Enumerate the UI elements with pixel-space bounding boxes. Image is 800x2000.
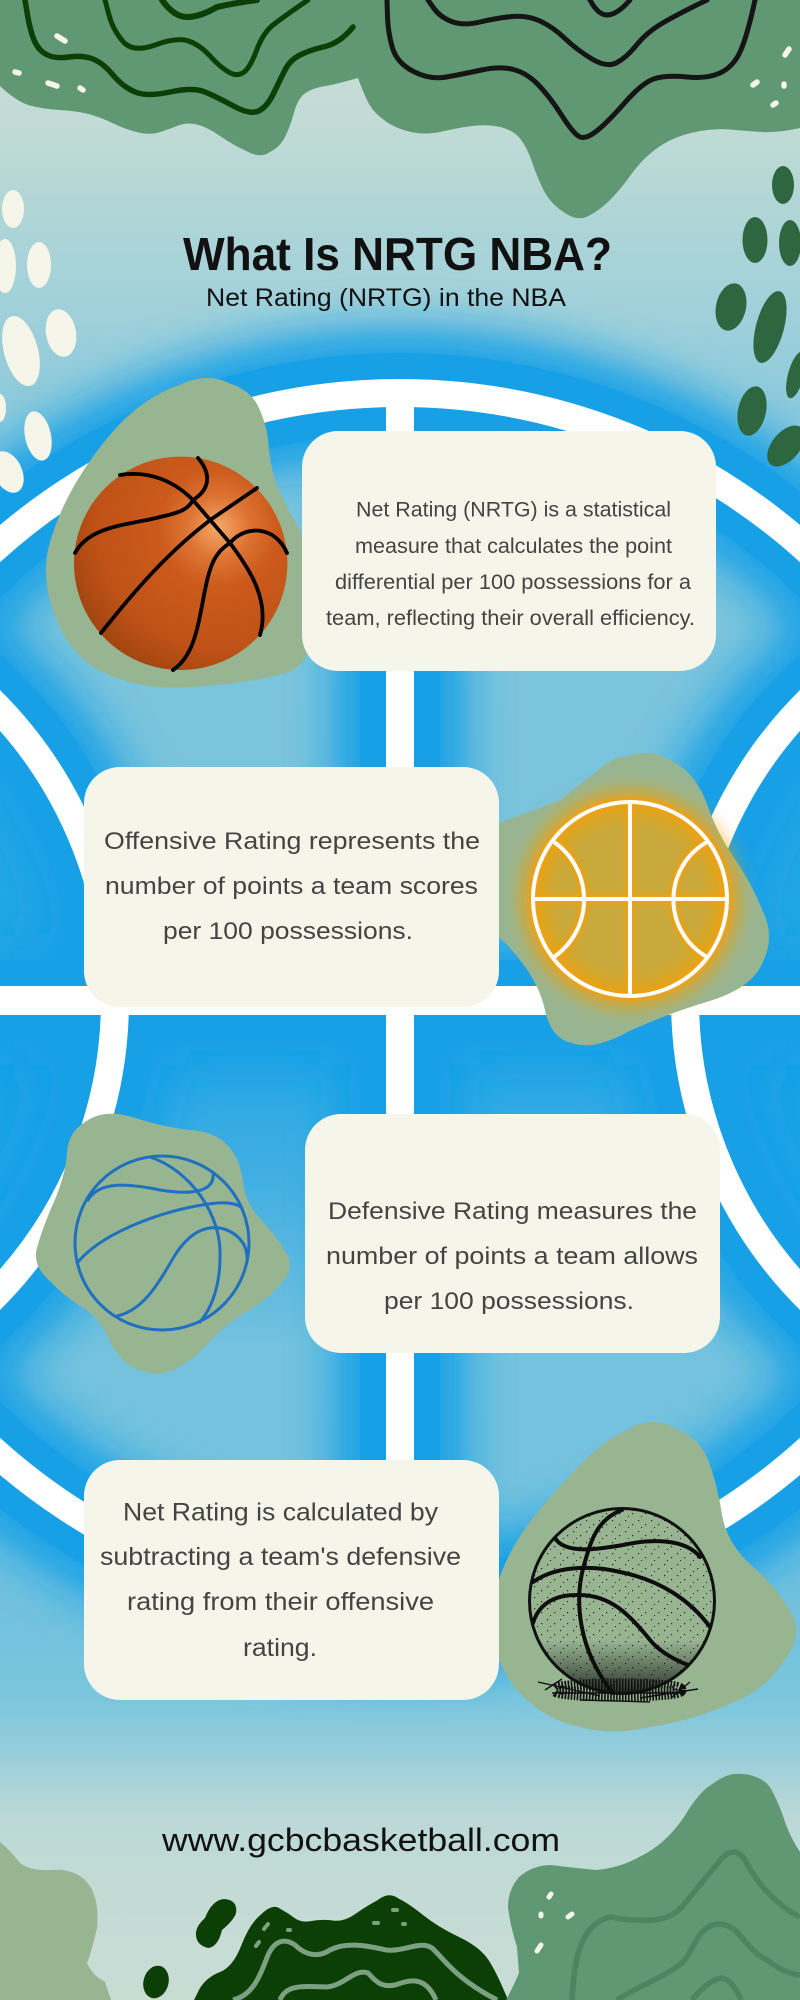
footer website: www.gcbcbasketball.com — [161, 1822, 560, 1858]
card text — [100, 1498, 461, 1662]
grass shadow — [538, 1679, 698, 1702]
icon: blue outline basketball — [75, 1156, 249, 1330]
card text: measure that calculates the point — [355, 534, 672, 558]
green blob behind neon basketball — [497, 756, 766, 1042]
card background — [302, 431, 716, 671]
cream ticks — [537, 1894, 572, 1951]
panel: net rating definition — [49, 381, 716, 685]
top decorative green blobs — [0, 0, 800, 218]
darker wavy lines — [572, 1852, 800, 2000]
panel: defensive rating — [39, 1114, 720, 1371]
icon: neon basketball — [532, 801, 728, 997]
green blob behind basketball — [49, 381, 310, 685]
card background — [84, 1460, 499, 1700]
bottom right green blob — [506, 1774, 800, 2000]
card background — [84, 767, 499, 1007]
dark green squiggles — [25, 0, 353, 112]
bottom left light green blob — [0, 1842, 111, 2000]
card text: subtracting a team's defensive — [100, 1543, 461, 1571]
card text: Defensive Rating measures the — [328, 1198, 697, 1225]
wavy lines — [233, 1941, 497, 2000]
subtitle: Net Rating (NRTG) in the NBA — [206, 284, 566, 312]
card text: differential per 100 possessions for a — [335, 570, 691, 594]
card text: per 100 possessions. — [163, 918, 413, 945]
panel: net rating calculation — [84, 1425, 793, 1728]
bottom center dark green blob — [140, 1895, 508, 2000]
card background — [305, 1114, 720, 1353]
card text: Offensive Rating represents the — [104, 828, 480, 855]
cream ticks — [15, 36, 789, 105]
basketball court background — [0, 393, 800, 1607]
small ticks — [256, 1910, 405, 1946]
card text — [326, 1198, 698, 1315]
card text: Net Rating (NRTG) is a statistical — [356, 498, 671, 522]
card text — [326, 498, 695, 630]
title: What Is NRTG NBA? — [183, 228, 612, 280]
icon: sketch basketball — [530, 1508, 714, 1702]
green blob behind blue basketball — [39, 1117, 287, 1371]
card text: number of points a team allows — [326, 1243, 698, 1270]
left cream ovals — [0, 190, 80, 498]
card text: number of points a team scores — [105, 873, 478, 900]
card text: rating. — [243, 1634, 317, 1662]
black squiggles — [387, 0, 755, 138]
card text: per 100 possessions. — [384, 1288, 634, 1315]
panel: offensive rating — [84, 756, 766, 1042]
icon: orange basketball — [74, 457, 287, 670]
card text: team, reflecting their overall efficiency. — [326, 606, 695, 630]
card text — [104, 828, 480, 945]
right dark green ovals — [711, 166, 800, 473]
green blob behind sketch basketball — [495, 1425, 793, 1728]
card text: rating from their offensive — [127, 1588, 434, 1616]
card text: Net Rating is calculated by — [123, 1498, 439, 1526]
